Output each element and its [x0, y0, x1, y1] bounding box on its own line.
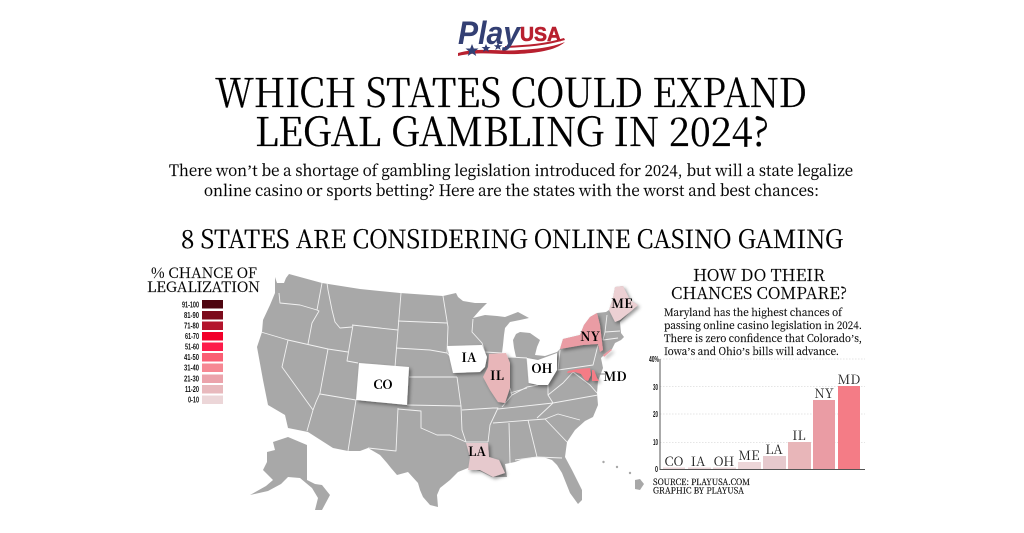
chart description: Iowa’s and Ohio’s bills will advance. [664, 344, 839, 359]
legend [147, 262, 260, 404]
legend labels: 91-100 [182, 300, 199, 310]
source note [653, 476, 750, 496]
axes [660, 359, 865, 470]
state: Illinois: IL [490, 365, 504, 384]
title [215, 62, 807, 158]
source note: SOURCE: PLAYUSA.COM [653, 476, 750, 488]
legend labels: 21-30 [184, 374, 199, 384]
state: Louisiana [466, 441, 505, 477]
US map [250, 274, 644, 510]
legend title: % CHANCE OF [151, 262, 257, 283]
map base: Alaska [250, 437, 330, 510]
intro text [169, 159, 853, 201]
legend labels: 51-60 [185, 342, 199, 352]
bar labels: OH [714, 451, 734, 470]
state: Maine [609, 286, 638, 322]
legend title: LEGALIZATION [147, 276, 260, 297]
intro text: There won’t be a shortage of gambling legislation introduced for 2024, but will a state legalize [169, 159, 853, 181]
bar labels: IA [691, 451, 706, 470]
bars [663, 386, 860, 469]
state: Maryland: MD [603, 366, 627, 385]
legend title [147, 262, 260, 297]
state: Iowa [447, 345, 487, 373]
y axis labels: 30 [653, 383, 658, 392]
state: Colorado [356, 363, 409, 405]
legend labels [182, 300, 199, 404]
chart heading: HOW DO THEIR [693, 262, 825, 286]
logo: PlayUSA: Play [458, 15, 522, 51]
bar labels: IL [792, 425, 806, 444]
state: Illinois [483, 353, 510, 403]
bar labels: CO [665, 451, 683, 470]
y axis labels [649, 355, 659, 474]
intro text: online casino or sports betting? Here are the states with the worst and best chances: [204, 179, 819, 201]
legend labels: 11-20 [185, 384, 199, 394]
legend labels: 41-50 [184, 352, 199, 362]
legend labels: 71-80 [184, 320, 199, 330]
title: WHICH STATES COULD EXPAND [215, 62, 807, 119]
bar labels: LA [765, 439, 783, 458]
state: Maine: ME [611, 293, 633, 312]
title: LEGAL GAMBLING IN 2024? [255, 101, 769, 158]
bar labels: MD [838, 369, 860, 388]
state: Colorado: CO [373, 374, 393, 393]
bar labels: NY [814, 383, 834, 402]
map base: contiguous states [257, 274, 638, 507]
chart description: Maryland has the highest chances of [664, 305, 843, 320]
y axis labels: 20 [653, 410, 658, 419]
y axis labels: 0 [655, 465, 658, 474]
chart description: passing online casino legislation in 2024. [664, 318, 862, 333]
bar chart [649, 355, 865, 474]
chart description: There is zero confidence that Colorado’s, [664, 331, 862, 346]
state: New York: NY [580, 326, 601, 345]
chart heading [671, 262, 847, 304]
chart heading: CHANCES COMPARE? [671, 280, 847, 304]
chart description [664, 305, 862, 359]
state: Maryland [567, 366, 627, 385]
logo: PlayUSA [458, 15, 565, 56]
state: Louisiana: LA [468, 441, 486, 460]
y axis labels: 40% [649, 355, 659, 364]
state: Ohio [527, 353, 557, 385]
legend swatches [202, 300, 223, 404]
source note: GRAPHIC BY PLAYUSA [653, 484, 745, 496]
legend labels: 81-90 [184, 310, 199, 320]
bar labels: ME [738, 445, 760, 464]
state: Ohio: OH [531, 358, 553, 377]
state borders [261, 283, 620, 463]
section heading: 8 STATES ARE CONSIDERING ONLINE CASINO GAMING [181, 220, 843, 256]
legend labels: 61-70 [185, 331, 199, 341]
legend labels: 31-40 [184, 362, 199, 372]
logo: PlayUSA: USA [520, 24, 561, 46]
y axis labels: 10 [653, 438, 658, 447]
map base: Hawaii [602, 461, 644, 490]
state: Iowa: IA [461, 347, 477, 366]
bar labels [665, 369, 860, 470]
state: New York [560, 313, 612, 357]
legend labels: 0-10 [188, 394, 199, 404]
